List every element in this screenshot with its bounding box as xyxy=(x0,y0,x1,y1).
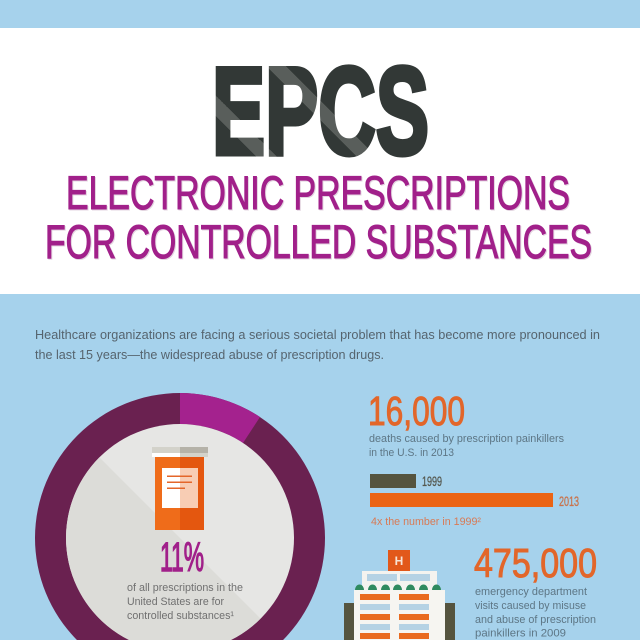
bar chart: 1999 vs 2013: 1999 xyxy=(422,473,442,489)
donut highlight segment xyxy=(180,393,260,443)
statistic: 475,000 visits: 475,000 xyxy=(474,540,597,586)
caption: deaths xyxy=(369,433,564,459)
donut chart: 11% of prescriptions xyxy=(35,393,325,640)
caption: visits: visits caused by misuse xyxy=(475,600,586,612)
intro text: the last 15 years—the widespread abuse of prescription drugs. xyxy=(35,348,384,362)
caption: visits: and abuse of prescription xyxy=(475,614,596,626)
caption: prescriptions: of all prescriptions in the xyxy=(127,582,243,594)
caption: 4x: 4x the number in 1999² xyxy=(371,516,481,528)
title: EPCS: EPCS xyxy=(212,43,429,181)
caption: deaths: deaths caused by prescription painkillers xyxy=(369,433,564,445)
caption: deaths: in the U.S. in 2013 xyxy=(369,447,454,459)
caption: visits: painkillers in 2009 xyxy=(475,628,566,640)
bar chart: 1999 vs 2013 xyxy=(370,473,579,528)
icon: pill bottle xyxy=(152,447,208,530)
icon: hospital building: H xyxy=(395,554,403,568)
intro text: Healthcare organizations are facing a serious societal problem that has become more pronounced in xyxy=(35,328,600,342)
statistic: 11%: 11% xyxy=(160,534,204,580)
caption: prescriptions: controlled substances¹ xyxy=(127,610,234,622)
caption: visits: emergency department xyxy=(475,586,587,598)
intro text xyxy=(35,328,600,362)
bar chart: 1999 vs 2013: 2013 xyxy=(559,493,579,509)
caption: visits xyxy=(475,586,596,640)
caption: prescriptions xyxy=(127,582,243,622)
caption: prescriptions: United States are for xyxy=(127,596,224,608)
header panel xyxy=(0,28,640,294)
icon: hospital building xyxy=(344,550,455,640)
statistic: 16,000 deaths: 16,000 xyxy=(368,388,465,434)
statistic: 16,000 deaths xyxy=(368,388,564,459)
statistic: 475,000 visits xyxy=(474,540,597,640)
